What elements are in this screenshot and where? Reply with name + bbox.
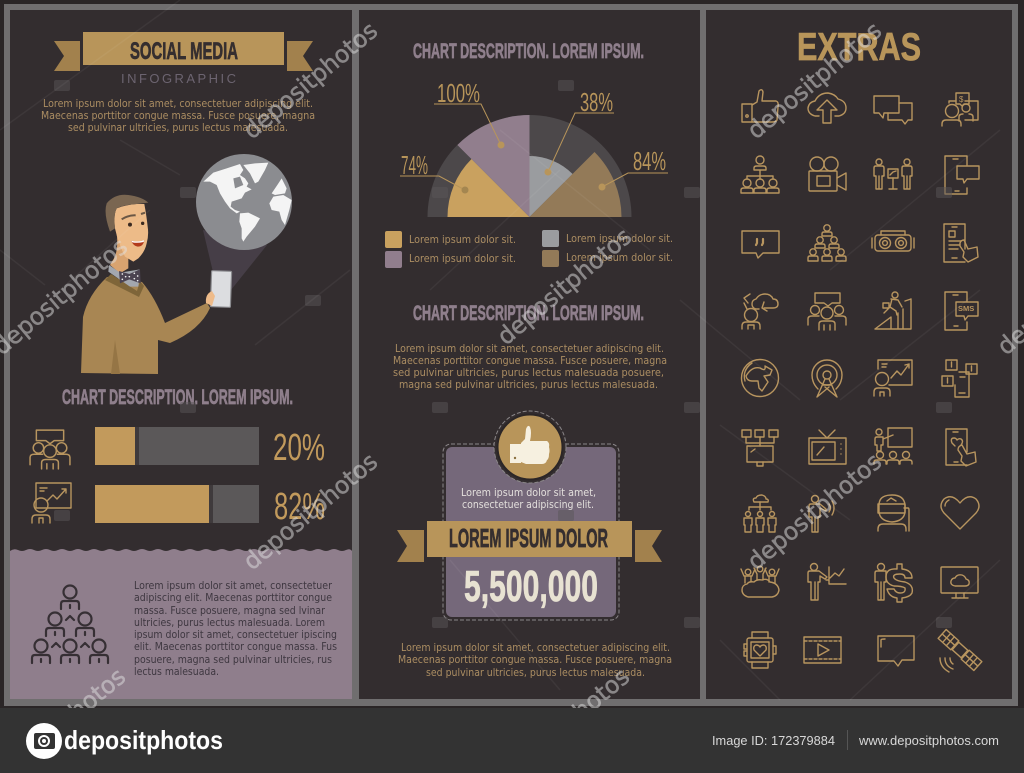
card text [461, 487, 596, 511]
icon: people pyramid [32, 586, 108, 663]
icon: phone with alert bubbles [942, 360, 977, 397]
icon: globe [742, 360, 778, 396]
icon: group with bubble [808, 293, 846, 330]
callout 74% [400, 150, 468, 194]
chart legend: Lorem ipsum dolor sit. [566, 252, 673, 264]
icon: heart [941, 497, 979, 529]
callout 84% [598, 146, 668, 190]
text block: Lorem ipsum dolor sit amet, consectetuer adipiscing elit. [401, 642, 670, 654]
icon: phone sms: SMS [958, 304, 974, 313]
bar chart row 20% [95, 427, 325, 469]
text block: ipsum dolor sit amet, consectetuer ipiscing [134, 629, 337, 641]
card text: Lorem ipsum dolor sit amet, [461, 487, 596, 499]
text block [134, 580, 337, 678]
chart legend: Lorem ipsum dolor sit. [409, 253, 516, 265]
intro text block: Maecenas porttitor congue massa. Fusce posuere, magna [41, 110, 315, 122]
chart heading 2: CHART DESCRIPTION. LOREM IPSUM. [413, 302, 644, 325]
chart legend: Lorem ipsum dolor sit. [566, 233, 673, 245]
icon: chat bubbles [874, 96, 912, 124]
icon: runner on rising chart [875, 292, 911, 329]
callout 100%: 100% [437, 78, 480, 108]
ribbon: lorem ipsum dolor [397, 521, 662, 562]
icon: network monitor [742, 430, 778, 466]
icon: radio tower [812, 360, 842, 397]
card text: consectetuer adipiscing elit. [462, 499, 594, 511]
panel: charts centre [359, 10, 700, 699]
text block: Lorem ipsum dolor sit amet, consectetuer [134, 580, 333, 592]
stat card [397, 411, 662, 620]
text block: massa. Fusce posuere, magna sed lvinar [134, 605, 326, 617]
icon: people on cloud [741, 566, 779, 597]
watermarks: depositphotos [742, 16, 887, 145]
watermarks: depositphotos [742, 447, 887, 576]
text block: Maecenas porttitor congue massa. Fusce posuere, magna [398, 654, 672, 666]
icon: presenter with chart [874, 360, 912, 396]
icon: people with dollar bubble [942, 93, 978, 126]
callout 100% [434, 78, 504, 148]
icon: group with speech bubble [30, 430, 70, 469]
icon: presenter with chart [32, 483, 71, 523]
icon: people with dollar bubble: $ [959, 95, 964, 104]
chart heading 1: CHART DESCRIPTION. LOREM IPSUM. [413, 40, 644, 63]
intro text block: sed pulvinar ultricies, purus lectus malesuada. [68, 122, 288, 134]
icon: phone with speech bubble [945, 156, 979, 194]
icon: video camera [809, 157, 846, 191]
bar chart row 82% [95, 485, 325, 528]
icon: monitor with cloud [941, 567, 978, 598]
panel: extras icons [706, 10, 1012, 699]
intro text block: Lorem ipsum dolor sit amet, consectetuer adipiscing elit. [43, 98, 313, 110]
text block: lectus malesuada. [134, 666, 219, 678]
icon: smart watch [744, 632, 776, 668]
icon: phone with tapping hand [944, 224, 978, 262]
text block: adipiscing elit. Maecenas porttitor congue [134, 592, 332, 604]
bar chart row 82%: 82% [274, 486, 325, 528]
icon: quote bubble [742, 231, 779, 258]
icon: presenter with graph [808, 564, 846, 600]
icon: person wearing vr headset [878, 495, 909, 531]
text block: Lorem ipsum dolor sit amet, consectetuer adipiscing elit. [395, 343, 664, 355]
text block: sed pulvinar ultricies, purus lectus malesuada. [426, 667, 645, 679]
callout 38%: 38% [580, 87, 613, 117]
bar chart row 20%: 20% [273, 427, 325, 469]
image id: Image ID: 172379884 [712, 733, 835, 748]
text block: ultricies, purus lectus malesuada. Lorem [134, 617, 325, 629]
text block: magna sed pulvinar ultricies, purus lectus malesuada. [399, 379, 658, 391]
text block [393, 343, 667, 391]
icon: cloud upload [808, 93, 846, 123]
text block: elit. Maecenas porttitor congue massa. Fus [134, 641, 337, 653]
semi-circular polar chart [400, 78, 668, 217]
icon: person with dollar sign [875, 564, 912, 602]
chart heading: CHART DESCRIPTION. LOREM IPSUM. [62, 386, 293, 409]
ribbon: lorem ipsum dolor: LOREM IPSUM DOLOR [449, 523, 608, 553]
title banner [54, 32, 313, 71]
icon: person with clouds [742, 294, 778, 329]
site url: www.depositphotos.com [858, 733, 999, 748]
text block: posuere, magna sed pulvinar ultricies, rus [134, 654, 332, 666]
icon: empty speech bubble [878, 636, 914, 666]
footer bar [0, 708, 1024, 773]
icon: cloud organisation [744, 495, 776, 532]
icon: television [809, 430, 846, 464]
watermarks: depositphotos [492, 222, 637, 351]
text block [398, 642, 672, 679]
icon: phone sms [945, 292, 978, 330]
panel: lavender footer section [10, 549, 352, 699]
watermark camera marks [54, 80, 952, 628]
text block: Maecenas porttitor congue massa. Fusce posuere, magna [393, 355, 667, 367]
icon: two people with chart [874, 159, 912, 189]
icon: phone with heart and hand [946, 429, 976, 466]
panel: social media intro [10, 10, 352, 699]
intro text block [41, 98, 315, 134]
watermarks: depositphotos [238, 447, 383, 576]
chart legend [385, 230, 673, 268]
title banner: SOCIAL MEDIA [130, 38, 238, 65]
text block: sed pulvinar ultricies, purus lectus malesuada posuere, [393, 367, 664, 379]
callout 38% [544, 87, 614, 176]
icon: video player [804, 637, 841, 663]
subtitle: INFOGRAPHIC [121, 71, 236, 86]
callout 84%: 84% [633, 146, 666, 176]
icon: thumbs up badge [494, 411, 566, 483]
icon: vr goggles [872, 231, 914, 251]
chart legend: Lorem ipsum dolor sit. [409, 234, 516, 246]
heading: extras: EXTRAS [797, 26, 921, 69]
icon: thumbs up [742, 90, 778, 122]
illustration: man holding phone with globe hologram [81, 154, 292, 374]
big number: 5,500,000 [464, 562, 598, 611]
icon: presenter with audience [874, 428, 912, 464]
watermarks: depositphotos [238, 16, 383, 145]
logo: depositphotos [26, 723, 223, 759]
icon: small people pyramid [808, 225, 846, 261]
icon: satellite [938, 629, 982, 672]
icon: org chart [741, 156, 779, 193]
callout 74%: 74% [401, 150, 428, 180]
icon: person with wifi signal [809, 496, 834, 532]
logo: depositphotos: depositphotos [64, 725, 223, 755]
